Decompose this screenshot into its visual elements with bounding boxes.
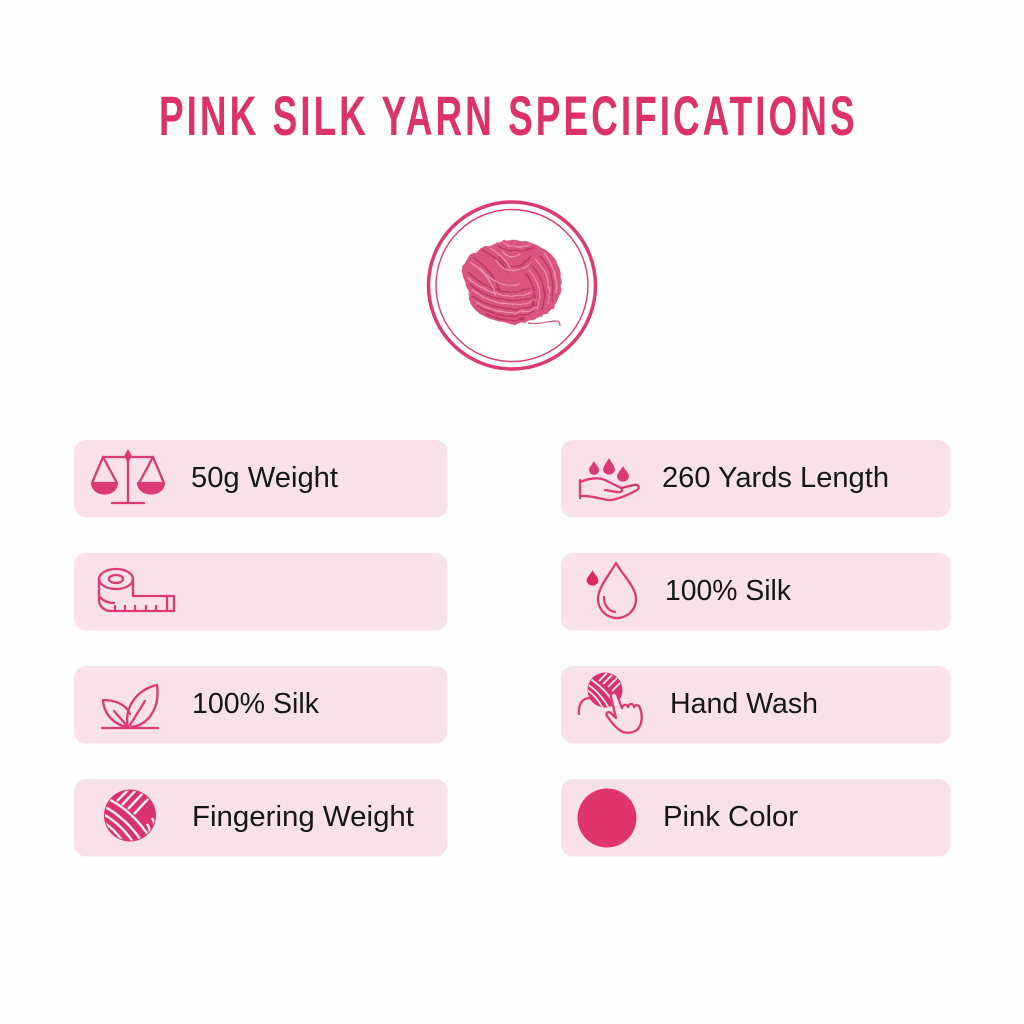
card: 100% Silk right — [561, 553, 950, 630]
label: 50g Weight — [191, 462, 338, 494]
card: 50g Weight — [74, 440, 448, 518]
icon: hand with drops — [580, 458, 639, 500]
icon: measuring tape — [99, 569, 174, 611]
icon: water drops — [586, 563, 636, 618]
label: Fingering Weight — [192, 801, 414, 833]
card: Pink Color — [561, 779, 950, 856]
icon: balance scale — [92, 451, 164, 503]
card: measuring tape (no label) — [74, 553, 448, 630]
card: Fingering Weight — [74, 779, 448, 856]
card: 100% Silk left — [74, 666, 448, 744]
label: Pink Color — [663, 801, 798, 833]
icon: yarn ball — [103, 790, 156, 842]
label: 100% Silk — [665, 575, 791, 607]
yarn medallion — [428, 202, 596, 369]
card: 260 Yards Length — [561, 440, 950, 518]
label: Hand Wash — [670, 688, 818, 720]
icon: yarn ball with hand — [579, 672, 642, 733]
yarn tail — [528, 321, 560, 326]
icon: leaves — [102, 685, 158, 728]
card: Hand Wash — [561, 666, 950, 744]
icon: color swatch — [578, 788, 636, 848]
title: PINK SILK YARN SPECIFICATIONS — [159, 85, 855, 148]
yarn skein — [461, 240, 561, 326]
label: 260 Yards Length — [662, 462, 889, 494]
label: 100% Silk — [192, 688, 319, 720]
